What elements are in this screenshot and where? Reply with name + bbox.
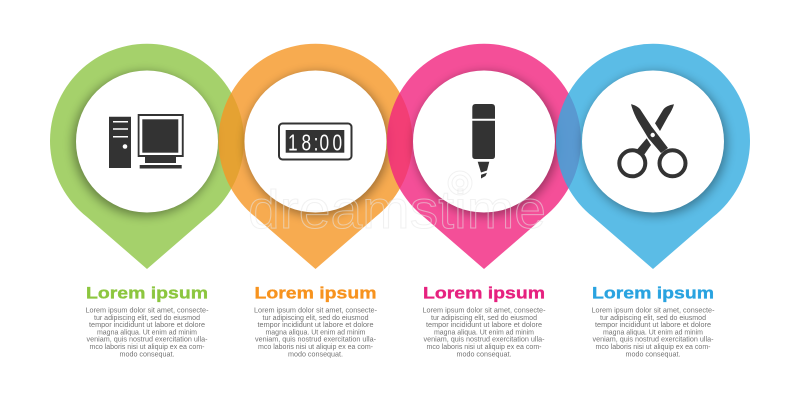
body: orange: tur adipiscing elit, sed do eiusmod: [262, 315, 369, 322]
watermark text: dreamstime: [248, 180, 546, 240]
icon: desktop computer: [109, 114, 184, 168]
body: pink: veniam, quis nostrud exercitation ulla-: [424, 337, 545, 344]
blue inner shadow: [583, 72, 727, 216]
heading: blue: Lorem ipsum: [592, 284, 714, 302]
text block: pink: [422, 284, 546, 358]
blue white circle: [582, 70, 724, 212]
body: orange: veniam, quis nostrud exercitation ulla-: [255, 337, 377, 344]
heading: green: Lorem ipsum: [86, 284, 208, 302]
body: pink: Lorem ipsum dolor sit amet, consecte-: [422, 308, 546, 314]
icon: scissors: [619, 104, 686, 176]
body: blue: magna aliqua. Ut enim ad minim: [603, 329, 703, 336]
body: green: modo consequat.: [120, 351, 175, 358]
body: blue: [592, 308, 715, 358]
body: pink: tempor incididunt ut labore et dolore: [426, 322, 542, 329]
green pin shape: [50, 44, 244, 269]
pink inner shadow: [414, 72, 558, 216]
body: blue: tempor incididunt ut labore et dolore: [595, 322, 711, 329]
orange inner shadow: [245, 72, 389, 216]
body: pink: mco laboris nisi ut aliquip ex ea com-: [426, 344, 542, 351]
heading: orange: Lorem ipsum: [254, 284, 376, 302]
body: orange: mco laboris nisi ut aliquip ex ea com-: [258, 344, 374, 351]
body: orange: modo consequat.: [288, 351, 343, 358]
panel: orange pin with clock: [218, 44, 412, 269]
body: blue: veniam, quis nostrud exercitation ulla-: [592, 337, 714, 344]
body: pink: modo consequat.: [456, 351, 512, 358]
body: orange: Lorem ipsum dolor sit amet, consecte-: [254, 308, 378, 314]
body: green: tur adipiscing elit, sed do eiusmod: [94, 315, 200, 322]
body: orange: magna aliqua. Ut enim ad minim: [266, 329, 366, 336]
body: orange: [254, 308, 378, 358]
watermark spiral: [448, 171, 472, 195]
orange white circle: [244, 70, 386, 212]
body: pink: tur adipiscing elit, sed do eiusmod: [431, 315, 537, 322]
orange pin shape: [218, 44, 412, 269]
body: pink: [422, 308, 546, 358]
green inner shadow: [73, 72, 217, 216]
text block: blue: [592, 284, 715, 358]
body: blue: Lorem ipsum dolor sit amet, consecte-: [592, 308, 715, 314]
body: blue: mco laboris nisi ut aliquip ex ea com-: [596, 344, 711, 351]
body: pink: magna aliqua. Ut enim ad minim: [434, 329, 534, 336]
body: green: Lorem ipsum dolor sit amet, consecte-: [86, 308, 209, 314]
pink white circle: [413, 70, 555, 212]
body: green: magna aliqua. Ut enim ad minim: [97, 329, 197, 336]
body: green: veniam, quis nostrud exercitation ulla-: [86, 337, 208, 344]
watermark: [248, 171, 546, 240]
text block: green: [86, 284, 209, 358]
body: blue: modo consequat.: [626, 351, 681, 358]
icon: digital clock: 18:00: [288, 131, 342, 156]
body: green: [86, 308, 209, 358]
green white circle: [76, 70, 218, 212]
panel: green pin with computer: [50, 44, 244, 269]
body: green: tempor incididunt ut labore et dolore: [89, 322, 205, 329]
pink pin shape: [387, 44, 581, 269]
text block: orange: [254, 284, 378, 358]
blue pin shape: [556, 44, 750, 269]
icon: highlighter marker: [472, 104, 495, 178]
icon: digital clock: [279, 124, 352, 160]
panel: pink pin with marker: [387, 44, 581, 269]
body: blue: tur adipiscing elit, sed do eiusmod: [600, 315, 706, 322]
body: orange: tempor incididunt ut labore et dolore: [258, 322, 374, 329]
panel: blue pin with scissors: [556, 44, 750, 269]
body: green: mco laboris nisi ut aliquip ex ea com-: [90, 344, 205, 351]
heading: pink: Lorem ipsum: [423, 284, 545, 302]
